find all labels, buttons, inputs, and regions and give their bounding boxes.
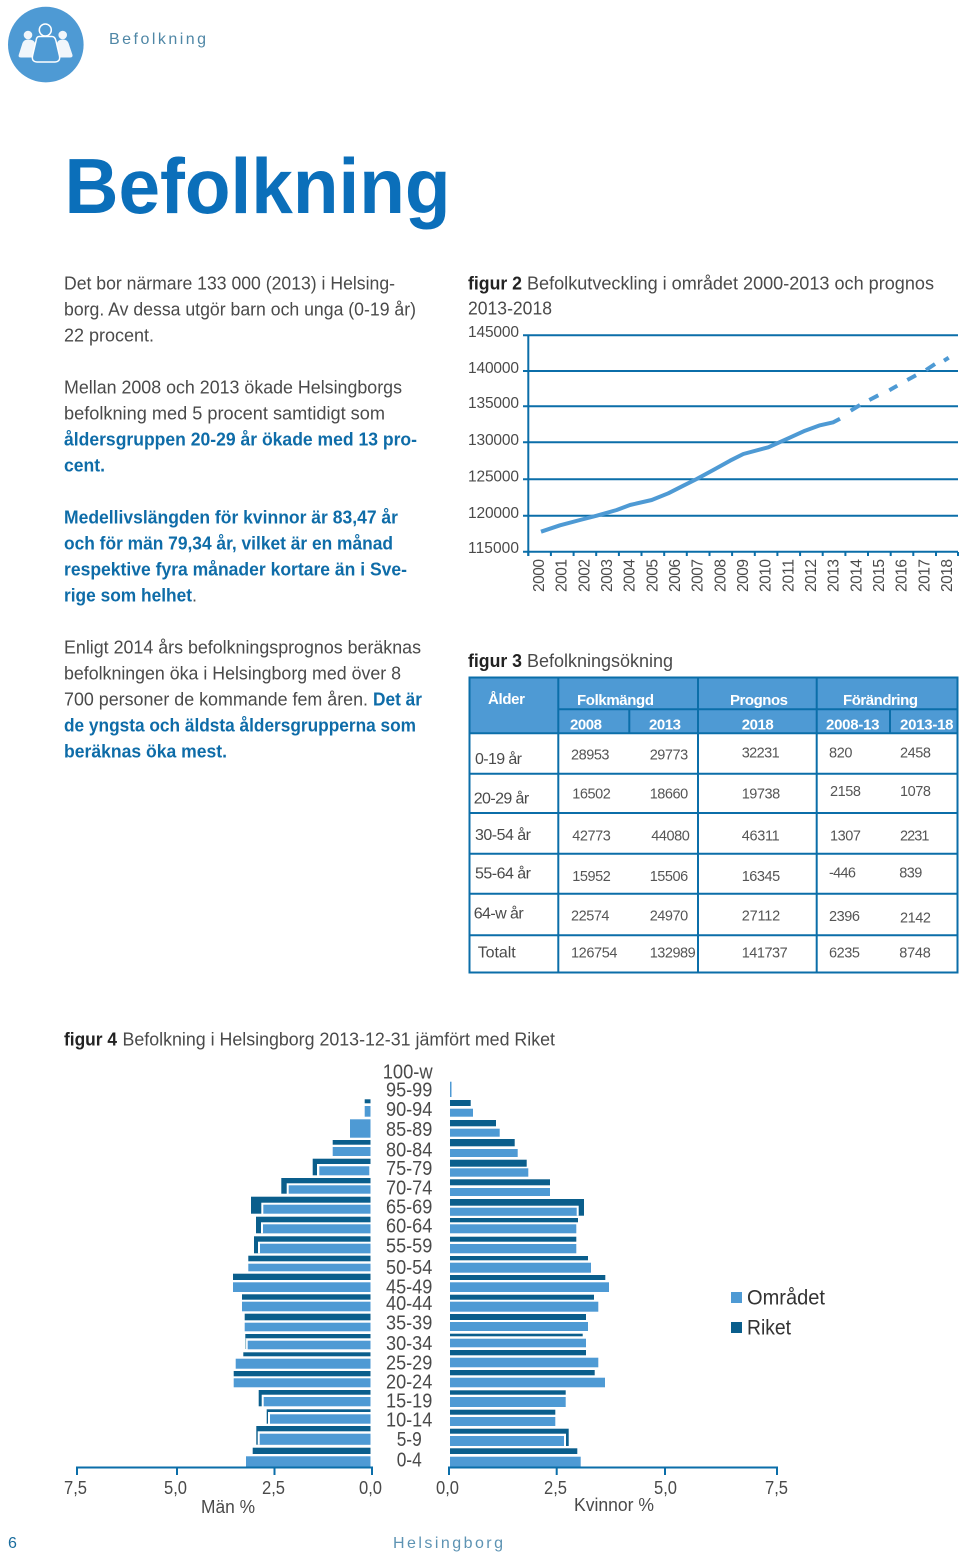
- heading: figur 2: 2013-2018: [468, 298, 552, 318]
- paragraph 3: .: [192, 585, 197, 605]
- row: Totalt: 126754: [571, 945, 618, 961]
- x-axis labels: 2018: [939, 559, 956, 592]
- age labels: 95-99: [386, 1080, 432, 1102]
- table header: 2013: [649, 716, 681, 734]
- paragraph 4: beräknas öka mest.: [64, 741, 227, 761]
- row: 55-64 år: 55-64 år: [475, 864, 532, 882]
- row: 64-w år: 64-w år: [474, 904, 524, 922]
- row: 64-w år: 2142: [900, 910, 931, 926]
- row: 0-19 år: 32231: [742, 745, 780, 761]
- legend: Området: [747, 1286, 825, 1310]
- row: 64-w år: 27112: [742, 909, 780, 925]
- population pyramid: figur 4: [64, 1061, 788, 1517]
- bars: 15-19: [259, 1390, 566, 1407]
- data line: [541, 419, 840, 532]
- bars: 45-49: [233, 1274, 609, 1292]
- x-axis labels: 2006: [667, 559, 684, 592]
- age labels: 70-74: [386, 1177, 432, 1199]
- paragraph 2: cent.: [64, 455, 105, 475]
- table header: Ålder: [488, 691, 525, 708]
- age labels: 30-34: [386, 1333, 432, 1355]
- paragraph 3: och för män 79,34 år, vilket är en månad: [64, 533, 393, 553]
- age labels: 35-39: [386, 1312, 432, 1334]
- row: 0-19 år: [475, 745, 931, 768]
- row: 55-64 år: 839: [899, 866, 922, 882]
- row: Totalt: 141737: [742, 945, 788, 961]
- x-axis labels: 2005: [644, 559, 661, 592]
- heading: figur 3: figur 3: [468, 651, 522, 671]
- y-axis labels: 140000: [468, 360, 519, 377]
- x-axis labels: 2009: [735, 559, 752, 592]
- forecast dashed line: [851, 358, 949, 411]
- paragraph 4: [64, 637, 422, 761]
- table header: 2018: [742, 716, 774, 734]
- bars: 55-59: [254, 1236, 576, 1253]
- axis labels: [64, 1477, 788, 1517]
- x-axis labels: [531, 559, 956, 592]
- paragraph 1: borg. Av dessa utgör barn och unga (0-19 år): [64, 299, 416, 319]
- axis labels: 2,5: [262, 1477, 285, 1498]
- icon: people in circle: [8, 7, 84, 82]
- age labels: 90-94: [386, 1099, 432, 1121]
- age labels: 85-89: [386, 1119, 432, 1141]
- age labels: 60-64: [386, 1216, 432, 1238]
- row: 20-29 år: 18660: [650, 787, 688, 803]
- age labels: 100-w: [383, 1061, 433, 1083]
- y-axis labels: 115000: [468, 540, 519, 557]
- bars: 20-24: [234, 1370, 605, 1387]
- table header: Prognos: [730, 692, 788, 709]
- age labels: 50-54: [386, 1257, 432, 1279]
- x-axis labels: 2008: [712, 559, 729, 592]
- paragraph 3: [64, 507, 407, 605]
- row: Totalt: Totalt: [478, 945, 516, 962]
- paragraph 1: Det bor närmare 133 000 (2013) i Helsing-: [64, 273, 395, 293]
- row: Totalt: 8748: [899, 945, 931, 961]
- row: 30-54 år: 46311: [742, 829, 780, 845]
- x-axis labels: 2011: [780, 559, 797, 592]
- age labels: 80-84: [386, 1140, 432, 1162]
- x-axis labels: 2016: [894, 559, 911, 592]
- row: 55-64 år: -446: [829, 866, 856, 882]
- paragraph 1: 22 procent.: [64, 325, 154, 345]
- row: 64-w år: 24970: [650, 909, 688, 925]
- x-axis labels: 2001: [554, 559, 571, 592]
- row: 55-64 år: 15952: [572, 869, 611, 885]
- paragraph 2: befolkning med 5 procent samtidigt som: [64, 403, 385, 423]
- axis: Män: [77, 1468, 372, 1475]
- row: 20-29 år: 20-29 år: [474, 789, 530, 807]
- axis labels: 7,5: [64, 1477, 87, 1498]
- bars: 35-39: [245, 1314, 588, 1331]
- heading: figur 4: Befolkning i Helsingborg 2013-12-31 jämfört med Riket: [122, 1030, 555, 1050]
- bars: 85-89: [350, 1119, 500, 1138]
- bars: 10-14: [267, 1409, 555, 1426]
- bars: 60-64: [256, 1217, 578, 1233]
- x-axis labels: 2003: [599, 559, 616, 592]
- age labels: [383, 1061, 433, 1472]
- y-axis labels: 130000: [468, 432, 519, 449]
- x-axis labels: 2017: [916, 559, 933, 592]
- bars: 75-79: [313, 1159, 528, 1177]
- row: Totalt: 6235: [829, 945, 860, 961]
- bars: 95-99: [450, 1082, 452, 1097]
- axis labels: Kvinnor %: [574, 1494, 654, 1515]
- table: figur 3: [470, 678, 958, 972]
- axis labels: 0,0: [436, 1477, 459, 1498]
- y-axis labels: 125000: [468, 468, 519, 486]
- age labels: 15-19: [386, 1391, 432, 1413]
- text block: left column: [64, 273, 422, 761]
- bars: 40-44: [242, 1294, 598, 1312]
- age labels: 65-69: [386, 1196, 432, 1218]
- row: 55-64 år: 15506: [650, 869, 688, 885]
- row: 20-29 år: 19738: [742, 787, 780, 803]
- paragraph 4: 700 personer de kommande fem åren.: [64, 689, 368, 709]
- row: 55-64 år: 16345: [742, 869, 780, 885]
- paragraph 3: Medellivslängden för kvinnor är 83,47 år: [64, 507, 398, 527]
- bars: 25-29: [236, 1350, 598, 1369]
- age labels: 20-24: [386, 1371, 432, 1393]
- paragraph 2: [64, 377, 417, 475]
- x-axis labels: 2014: [848, 559, 865, 592]
- axis labels: 0,0: [359, 1477, 382, 1498]
- y-axis labels: 135000: [468, 395, 519, 412]
- bars: 30-34: [245, 1334, 586, 1349]
- row: 0-19 år: 0-19 år: [475, 750, 523, 768]
- paragraph 4: Enligt 2014 års befolkningsprognos beräknas: [64, 637, 421, 657]
- heading: figur 2: figur 2: [468, 273, 522, 293]
- row: 30-54 år: 30-54 år: [475, 826, 532, 844]
- age labels: 45-49: [386, 1276, 432, 1298]
- bars: 5-9: [256, 1426, 569, 1446]
- row: 0-19 år: 820: [829, 745, 852, 761]
- row: 64-w år: 22574: [571, 909, 610, 925]
- row: 64-w år: [474, 904, 931, 926]
- heading: figur 2: [468, 273, 934, 318]
- y-axis labels: [468, 324, 519, 557]
- row: 20-29 år: 2158: [830, 784, 861, 800]
- line chart: figur 2: [468, 324, 958, 592]
- table header: [470, 678, 958, 734]
- axis labels: 7,5: [765, 1477, 788, 1498]
- row: 20-29 år: 1078: [900, 784, 931, 800]
- heading: figur 3: Befolkningsökning: [527, 651, 673, 671]
- x-axis labels: 2000: [531, 559, 548, 592]
- paragraph 4: befolkningen öka i Helsingborg med över 8: [64, 663, 401, 683]
- x-axis labels: 2007: [690, 559, 707, 592]
- table header: 2013-18: [900, 716, 954, 734]
- paragraph 3: respektive fyra månader kortare än i Sve-: [64, 559, 407, 579]
- age labels: 40-44: [386, 1293, 432, 1315]
- bars: 50-54: [248, 1256, 591, 1273]
- title: Befolkning: [64, 142, 450, 230]
- row: 0-19 år: 29773: [650, 747, 688, 763]
- row: 64-w år: 2396: [829, 909, 860, 925]
- table header: Folkmängd: [577, 692, 654, 709]
- row: 30-54 år: [475, 826, 930, 845]
- row: 30-54 år: 1307: [830, 829, 861, 845]
- axis labels: 5,0: [164, 1477, 187, 1498]
- row: 0-19 år: 28953: [571, 747, 610, 763]
- age labels: 10-14: [386, 1410, 432, 1432]
- bars: 65-69: [251, 1197, 584, 1216]
- axis labels: 5,0: [654, 1477, 677, 1498]
- row: 20-29 år: 16502: [572, 787, 611, 803]
- y-axis labels: 120000: [468, 505, 519, 522]
- paragraph 3: rige som helhet: [64, 585, 192, 605]
- row: 55-64 år: [475, 864, 922, 885]
- footer: Helsingborg: [393, 1535, 506, 1552]
- table header: Förändring: [843, 692, 918, 709]
- axis: Kvinnor: [449, 1468, 777, 1475]
- bars: 70-74: [281, 1178, 550, 1196]
- paragraph 2: Mellan 2008 och 2013 ökade Helsingborgs: [64, 377, 402, 397]
- x-axis labels: 2002: [576, 559, 593, 592]
- heading: figur 4: figur 4: [64, 1030, 117, 1050]
- x-axis labels: 2012: [803, 559, 820, 592]
- bars: 80-84: [333, 1139, 518, 1157]
- age labels: 25-29: [386, 1352, 432, 1374]
- x-axis labels: 2015: [871, 559, 888, 592]
- bars: 90-94: [365, 1099, 473, 1117]
- y-axis labels: 145000: [468, 324, 519, 341]
- age labels: 55-59: [386, 1235, 432, 1257]
- legend: Riket: [747, 1316, 791, 1340]
- paragraph 4: Det är: [373, 689, 422, 709]
- table header: 2008: [570, 716, 602, 734]
- x-axis labels: 2004: [622, 559, 639, 592]
- x-axis labels: 2013: [826, 559, 843, 592]
- row: Totalt: 132989: [650, 945, 696, 961]
- heading: figur 2: Befolkutveckling i området 2000-2013 och prognos: [527, 273, 934, 293]
- legend: [731, 1286, 825, 1340]
- axis labels: 2,5: [544, 1477, 567, 1498]
- paragraph 1: [64, 273, 416, 345]
- axis labels: Män %: [201, 1496, 255, 1517]
- row: 30-54 år: 2231: [900, 829, 930, 845]
- row: 0-19 år: 2458: [900, 745, 931, 761]
- bars: 0-4: [246, 1448, 581, 1467]
- paragraph 4: de yngsta och äldsta åldersgrupperna som: [64, 715, 416, 735]
- x-axis labels: 2010: [758, 559, 775, 592]
- age labels: 0-4: [397, 1450, 422, 1472]
- section label: Befolkning: [109, 31, 209, 48]
- row: 30-54 år: 44080: [651, 829, 690, 845]
- table header: 2008-13: [826, 716, 880, 734]
- paragraph 2: åldersgruppen 20-29 år ökade med 13 pro-: [64, 429, 417, 449]
- row: 20-29 år: [474, 784, 931, 807]
- row: Totalt: [478, 945, 931, 962]
- age labels: 5-9: [397, 1429, 422, 1451]
- page number: 6: [8, 1535, 17, 1552]
- age labels: 75-79: [386, 1158, 432, 1180]
- row: 30-54 år: 42773: [572, 829, 611, 845]
